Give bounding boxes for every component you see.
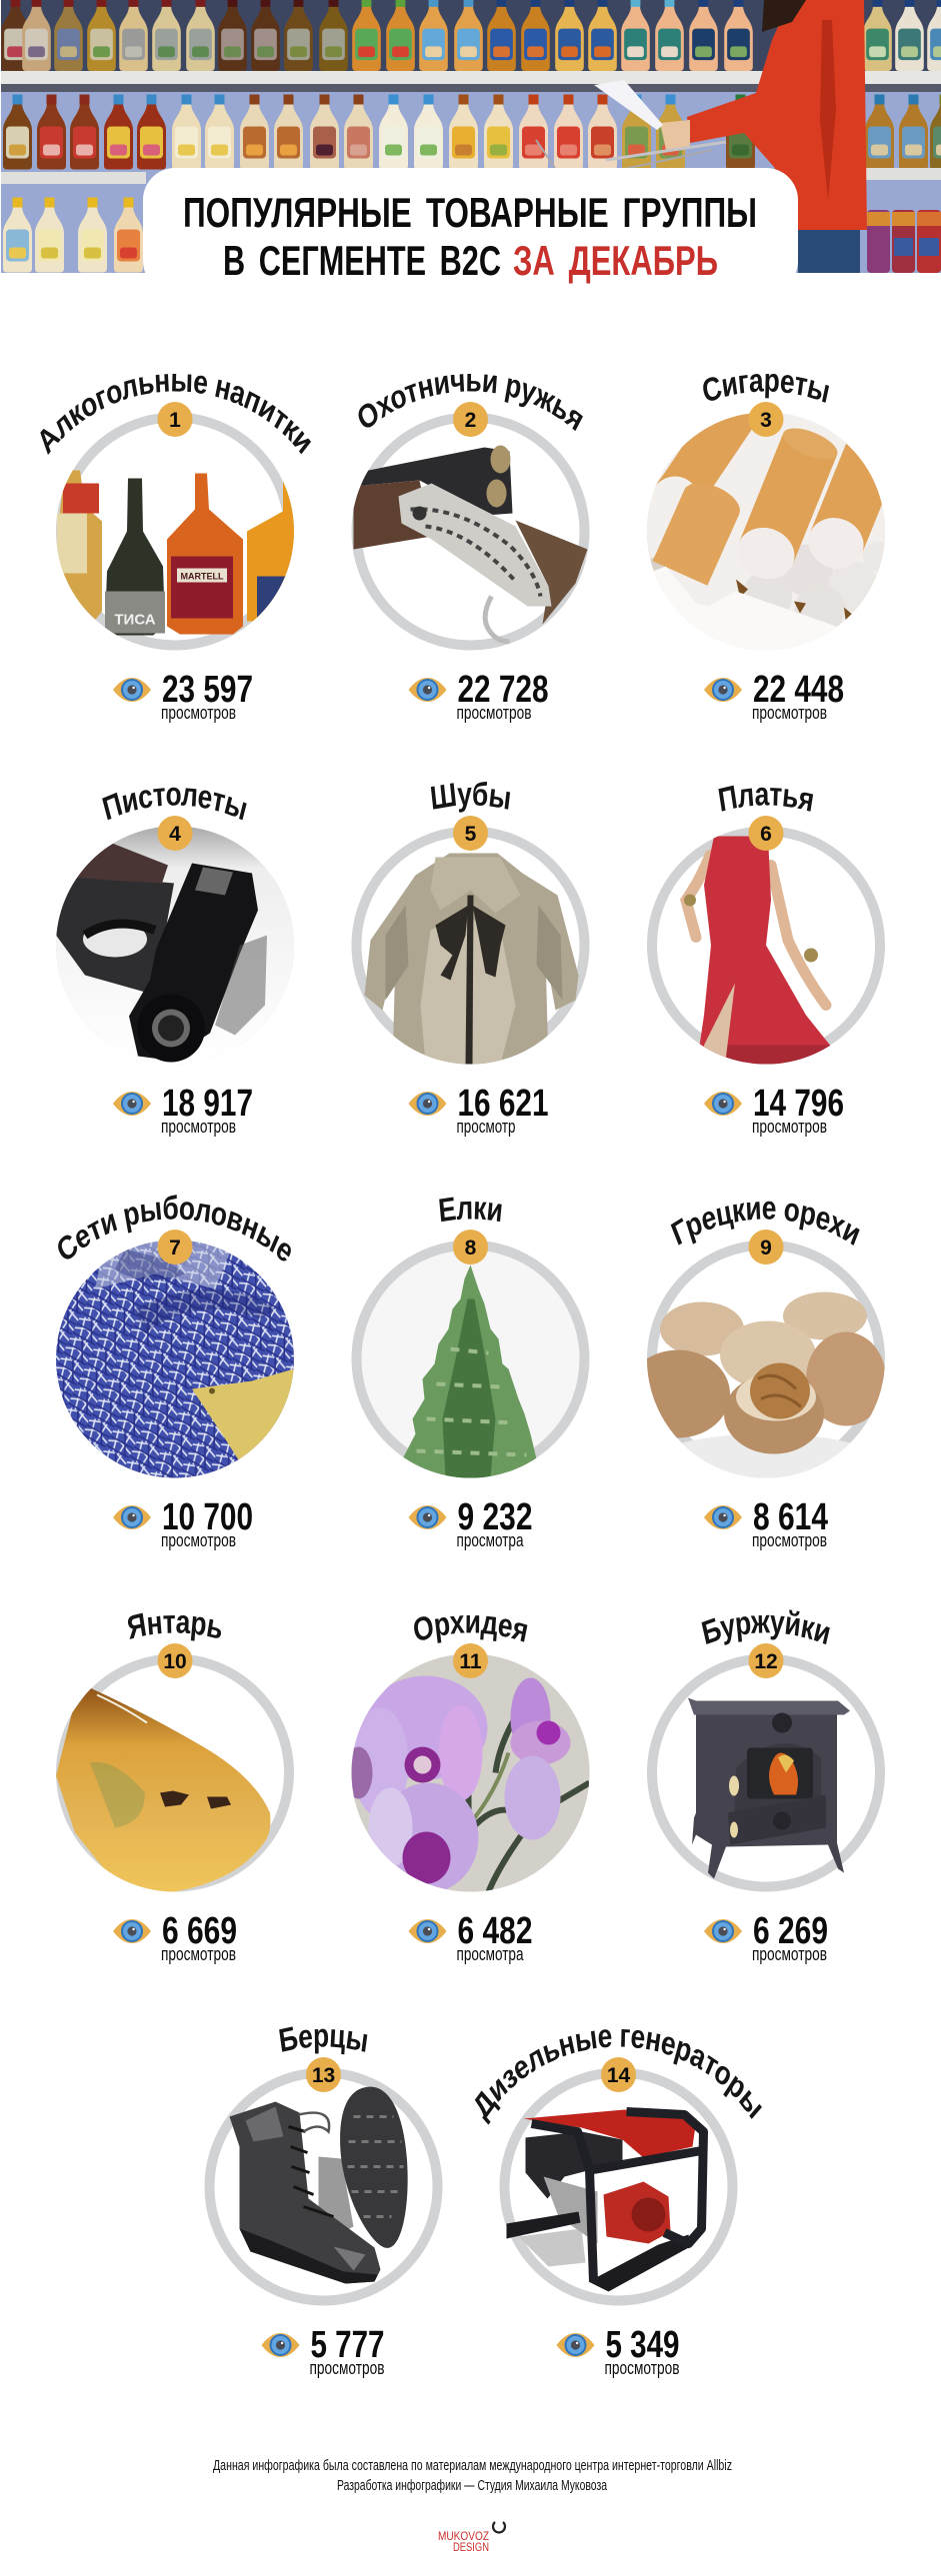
icon: eye (113, 1505, 151, 1529)
photo: bottles (57, 470, 294, 636)
photo: pistol (56, 826, 294, 1064)
item 8: Елки (352, 1198, 590, 1550)
rank badge (748, 1230, 784, 1265)
item 10: Янтарь (56, 1613, 294, 1964)
rank badge (748, 1643, 784, 1678)
icon: eye (704, 1919, 742, 1943)
views label: просмотр (456, 1117, 516, 1137)
icon: eye (408, 678, 446, 702)
rank badge: 6 (760, 823, 772, 846)
rank badge (748, 402, 784, 437)
name: Берцы (279, 2026, 368, 2055)
logo (438, 2522, 505, 2554)
views count: 10 700 (162, 1496, 253, 1538)
views count: 14 796 (753, 1083, 844, 1125)
views label: просмотров (161, 1530, 236, 1550)
item 5: Шубы (352, 782, 590, 1137)
item 14: Дизельные генераторы (474, 2029, 762, 2378)
name: Алкогольные напитки (40, 374, 311, 455)
photo: boots (230, 2085, 412, 2283)
icon: eye (408, 1919, 446, 1943)
item 7: Сети рыболовные (56, 1195, 294, 1550)
photo: shotgun (354, 446, 588, 642)
rank badge (158, 1230, 192, 1265)
header photo: supermarket shelves (1, 0, 941, 273)
views count: 6 669 (162, 1910, 237, 1952)
photo: red dress (684, 836, 844, 1070)
rank badge: 2 (465, 409, 476, 432)
rank badge (306, 2057, 341, 2092)
rank badge: 13 (312, 2064, 335, 2087)
icon: eye (408, 1505, 446, 1529)
name: Сигареты (703, 374, 830, 403)
views label: просмотров (456, 703, 532, 723)
views label: просмотров (161, 703, 236, 723)
views label: просмотра (456, 1530, 524, 1550)
photo: cigarettes (647, 414, 885, 650)
name: Платья (718, 786, 814, 812)
photo: fur coat (364, 854, 578, 1064)
rank badge (453, 816, 488, 851)
rank badge (748, 816, 784, 851)
item 1: Алкогольные напитки (40, 374, 311, 723)
icon: eye (556, 2333, 594, 2357)
views count: 5 777 (310, 2324, 384, 2366)
views label: просмотров (310, 2358, 384, 2378)
bottle label text: ТИСА (114, 612, 156, 628)
photo: walnuts (647, 1291, 885, 1477)
name: Грецкие орехи (670, 1202, 860, 1246)
name: Шубы (430, 782, 510, 813)
views count: 22 728 (458, 669, 548, 711)
lower shelf (1, 172, 146, 184)
rank badge: 4 (169, 823, 181, 846)
logo: MUKOVOZ (438, 2529, 489, 2543)
views label: просмотров (604, 2358, 680, 2378)
footer credits line 2: Разработка инфографики — Студия Михаила Муковоза (337, 2477, 607, 2494)
views count: 6 482 (458, 1910, 532, 1952)
lower left bottles (3, 198, 143, 272)
footer credits line 1: Данная инфографика была составлена по материалам международного центра интернет-торговли Allbiz (213, 2457, 732, 2474)
rank badge: 3 (760, 409, 772, 432)
icon: eye (113, 1919, 151, 1943)
photo: amber with insects (56, 1687, 270, 1893)
item 13: Берцы (204, 2026, 442, 2378)
item 9: Грецкие орехи (647, 1202, 885, 1550)
item 4: Пистолеты (56, 788, 294, 1137)
rank badge: 14 (607, 2064, 630, 2087)
rank badge: 12 (754, 1650, 778, 1673)
rank badge (158, 816, 192, 851)
name: Пистолеты (102, 788, 247, 820)
middle shelf bottles (3, 94, 941, 170)
title line 2: В СЕГМЕНТЕ B2C (223, 237, 501, 284)
rank badge: 9 (760, 1237, 772, 1260)
icon: eye (408, 1092, 446, 1116)
rank badge (601, 2057, 636, 2092)
rank badge: 8 (465, 1237, 477, 1260)
item 12: Буржуйки (647, 1609, 885, 1964)
views count: 5 349 (606, 2324, 680, 2366)
item 11: Орхидея (352, 1615, 590, 1964)
item 3: Сигареты (647, 374, 885, 723)
photo: fir tree (402, 1266, 536, 1477)
title line 1: ПОПУЛЯРНЫЕ ТОВАРНЫЕ ГРУППЫ (183, 189, 757, 236)
upper shelf (1, 71, 941, 84)
top shelf bottles (1, 0, 941, 71)
views label: просмотров (752, 1944, 827, 1964)
views label: просмотров (752, 703, 827, 723)
rank badge: 5 (465, 823, 477, 846)
name: Елки (439, 1198, 502, 1222)
icon: eye (113, 1092, 151, 1116)
views count: 18 917 (162, 1083, 253, 1125)
rank badge (453, 1643, 488, 1678)
name: Охотничьи ружья (358, 374, 583, 432)
rank badge (158, 1643, 192, 1678)
views count: 8 614 (753, 1496, 828, 1538)
photo: stove (688, 1697, 850, 1879)
name: Дизельные генераторы (474, 2029, 762, 2125)
views label: просмотра (456, 1944, 524, 1964)
views count: 23 597 (162, 669, 253, 711)
views label: просмотров (752, 1117, 827, 1137)
item 2: Охотничьи ружья (352, 374, 590, 723)
views count: 6 269 (753, 1910, 828, 1952)
photo: fishing net with fish (56, 1240, 294, 1477)
name: Буржуйки (702, 1609, 830, 1645)
icon: eye (704, 1092, 742, 1116)
icon: eye (113, 678, 151, 702)
rank badge: 10 (163, 1650, 187, 1673)
logo: DESIGN (453, 2540, 489, 2554)
icon: eye (262, 2333, 300, 2357)
name: Сети рыболовные (58, 1195, 291, 1262)
views count: 9 232 (458, 1496, 532, 1538)
rank badge: 1 (169, 409, 181, 432)
views label: просмотров (752, 1530, 827, 1550)
rank badge (453, 402, 488, 437)
icon: eye (704, 678, 742, 702)
item 6: Платья (647, 786, 885, 1137)
name: Орхидея (414, 1615, 528, 1643)
views count: 22 448 (753, 669, 844, 711)
panel: title box (143, 168, 798, 293)
rank badge (158, 402, 192, 437)
icon: eye (704, 1505, 742, 1529)
photo: generator (506, 2109, 704, 2291)
views count: 16 621 (458, 1083, 548, 1125)
rank badge (453, 1230, 488, 1265)
bottle label text: MARTELL (180, 572, 224, 582)
views label: просмотров (161, 1117, 236, 1137)
title highlighted: ЗА ДЕКАБРЬ (513, 237, 718, 284)
views label: просмотров (161, 1944, 236, 1964)
rank badge: 11 (459, 1650, 482, 1673)
rank badge: 7 (169, 1237, 181, 1260)
name: Янтарь (128, 1613, 221, 1641)
photo: orchid (344, 1653, 590, 1893)
shopper: paper, hand, cart handle, jacket, jeans, hair (536, 0, 867, 273)
lower right jars (867, 210, 941, 273)
